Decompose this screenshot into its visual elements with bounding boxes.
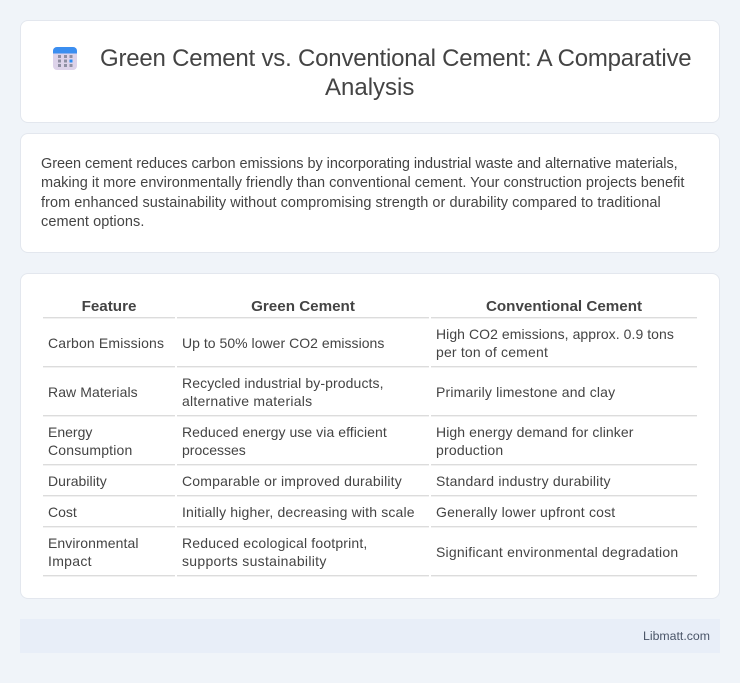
icon: calendar	[53, 47, 77, 70]
row: carbon emissions	[48, 326, 674, 360]
row: carbon emissions: Up to 50% lower CO2 emissions	[182, 335, 384, 351]
row: durability	[48, 473, 611, 489]
row: environmental impact: Impact	[48, 553, 92, 569]
table header	[82, 298, 642, 315]
row: durability: Durability	[48, 473, 107, 489]
row: environmental impact	[48, 535, 678, 569]
title: Green Cement vs. Conventional Cement: A Comparative	[100, 45, 691, 72]
row: raw materials: Recycled industrial by-products,	[182, 375, 384, 391]
table header: Conventional Cement	[486, 298, 642, 315]
row: energy consumption: High energy demand for clinker	[436, 424, 634, 440]
row: carbon emissions: High CO2 emissions, approx. 0.9 tons	[436, 326, 674, 342]
header panel	[20, 20, 720, 123]
row: environmental impact: supports sustainability	[182, 553, 327, 569]
row: environmental impact: Significant environmental degradation	[436, 544, 678, 560]
row: energy consumption: Reduced energy use via efficient	[182, 424, 387, 440]
row: durability: Standard industry durability	[436, 473, 611, 489]
row: energy consumption: Consumption	[48, 442, 132, 458]
title: Analysis	[325, 74, 414, 101]
row: cost: Generally lower upfront cost	[436, 504, 615, 520]
row: carbon emissions: Carbon Emissions	[48, 335, 164, 351]
row: cost	[48, 504, 616, 520]
row: energy consumption: production	[436, 442, 503, 458]
row: carbon emissions: per ton of cement	[436, 344, 548, 360]
row: raw materials	[48, 375, 616, 409]
row: energy consumption: Energy	[48, 424, 92, 440]
row: cost: Cost	[48, 504, 77, 520]
row: cost: Initially higher, decreasing with scale	[182, 504, 415, 520]
intro text panel: making it more environmentally friendly than conventional cement. Your construction projects benefit	[41, 175, 684, 191]
row: environmental impact: Environmental	[48, 535, 139, 551]
row: environmental impact: Reduced ecological footprint,	[182, 535, 368, 551]
row: raw materials: Primarily limestone and clay	[436, 384, 615, 400]
row: raw materials: alternative materials	[182, 393, 312, 409]
row: energy consumption	[48, 424, 634, 458]
footer credit: Libmatt.com	[643, 629, 710, 643]
comparison table panel	[20, 273, 720, 599]
intro text panel: cement options.	[41, 214, 144, 230]
intro text panel: Green cement reduces carbon emissions by incorporating industrial waste and alternative materials,	[41, 156, 678, 172]
intro text panel: from enhanced sustainability without compromising strength or durability compared to traditional	[41, 195, 661, 211]
table header: Green Cement	[251, 298, 355, 315]
title	[100, 45, 691, 101]
footer bar	[20, 619, 720, 653]
intro text panel	[20, 133, 720, 253]
table header: Feature	[82, 298, 136, 315]
row: raw materials: Raw Materials	[48, 384, 138, 400]
row: energy consumption: processes	[182, 442, 246, 458]
row: durability: Comparable or improved durability	[182, 473, 402, 489]
